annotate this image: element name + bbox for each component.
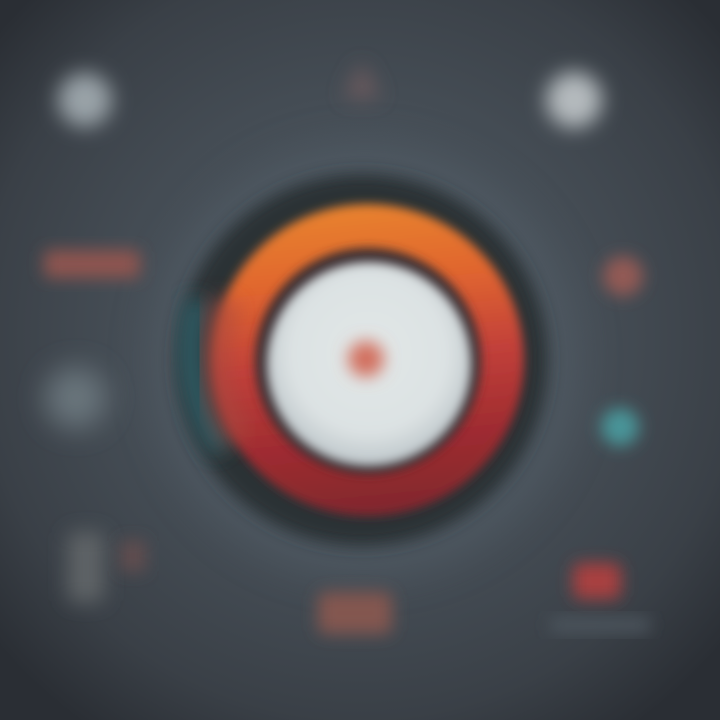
white disc xyxy=(267,262,471,466)
icon: bottom right red block xyxy=(573,563,621,599)
centre red dot xyxy=(348,341,384,377)
inner dark ring xyxy=(255,248,481,474)
dial outer dark ring xyxy=(176,174,548,546)
icon: bottom left grey bar xyxy=(68,532,104,602)
label: bottom centre red text xyxy=(318,592,392,634)
dial halo xyxy=(150,145,580,575)
central dial xyxy=(150,145,580,575)
icon: top right light circle xyxy=(546,72,602,128)
icon: right red circle xyxy=(603,256,643,296)
icon: top centre red triangle xyxy=(343,62,381,98)
icon: top left grey circle xyxy=(58,73,112,127)
orange-red ring xyxy=(212,204,524,516)
icon: right teal circle xyxy=(601,408,639,446)
ring left muted shade xyxy=(215,300,240,440)
label: bottom right grey caption xyxy=(550,618,650,632)
icon: bottom left red mark xyxy=(120,540,146,572)
teal rim accent xyxy=(190,300,222,450)
label: left red text xyxy=(44,250,140,278)
icon: left grey circle xyxy=(45,367,107,429)
